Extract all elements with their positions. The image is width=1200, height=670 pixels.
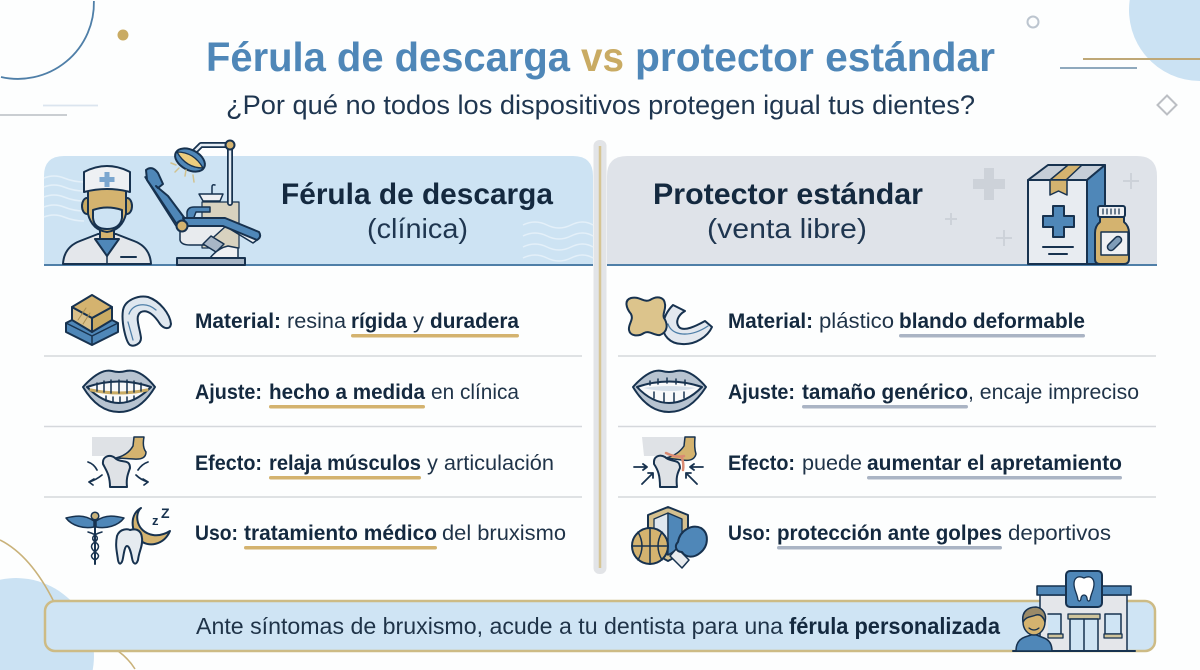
- row: protector efecto: [634, 437, 1122, 487]
- text: ajuste: [195, 381, 519, 408]
- text: efecto: Efecto:: [728, 452, 795, 475]
- text: material: blando deformable: [899, 310, 1085, 333]
- text: uso: Uso:: [195, 522, 238, 545]
- callout text: Ante síntomas de bruxismo, acude a tu dentista para una: [196, 613, 783, 639]
- text: material: plástico: [819, 310, 894, 333]
- icon: dental chair: [145, 140, 260, 265]
- text: ajuste: hecho a medida: [269, 381, 425, 404]
- callout: recommendation banner: [45, 571, 1155, 651]
- icon: fitted teeth: [83, 371, 155, 412]
- text: material: [195, 310, 519, 338]
- decoration: waves: [44, 176, 593, 261]
- title: vs: [581, 34, 624, 80]
- text: ajuste: en clínica: [431, 381, 519, 404]
- text: ajuste: [728, 381, 1139, 408]
- title: protector estándar: [635, 34, 995, 80]
- heading: férula: Férula de descarga: [281, 178, 553, 211]
- row: férula material: [66, 295, 519, 346]
- callout text: férula personalizada: [789, 613, 1000, 639]
- text: ajuste: tamaño genérico: [802, 381, 968, 404]
- text: material: Material:: [728, 310, 813, 333]
- text: efecto: puede: [802, 452, 862, 475]
- icon: relaxed joint: [88, 437, 148, 487]
- title: Férula de descarga: [206, 34, 571, 80]
- decoration: plus signs: [945, 168, 1139, 246]
- text: material: duradera: [430, 310, 519, 333]
- icon: dental clinic: [1013, 571, 1135, 651]
- row: protector uso: [632, 507, 1111, 568]
- subtitle: ¿Por qué no todos los dispositivos protegen igual tus dientes?: [226, 90, 975, 120]
- text: ajuste: Ajuste:: [195, 381, 262, 404]
- text: uso: [195, 522, 566, 550]
- subheading: clínica: (clínica): [367, 213, 468, 244]
- text: ajuste: , encaje impreciso: [968, 381, 1139, 404]
- text: material: y: [413, 310, 425, 333]
- icon: shield, ball and glove: [632, 507, 707, 568]
- icon: resin block and splint: [66, 295, 171, 346]
- text: uso: tratamiento médico: [244, 522, 437, 545]
- text: uso: Uso:: [728, 522, 771, 545]
- icon: generic fit teeth: [633, 371, 706, 412]
- row: protector material: [626, 297, 1085, 344]
- text: material: Material:: [195, 310, 281, 333]
- text: efecto: [195, 452, 554, 480]
- text: ajuste: Ajuste:: [728, 381, 795, 404]
- text: uso: [728, 522, 1111, 550]
- icon: dentist at door: [1016, 607, 1052, 651]
- decoration: top-left shapes: [0, 1, 128, 115]
- row: protector ajuste: [633, 371, 1139, 412]
- text: uso: del bruxismo: [442, 522, 566, 545]
- center divider: [594, 140, 606, 574]
- icon: clenching joint: [634, 437, 703, 487]
- row: férula uso: [66, 505, 566, 564]
- icon: soft plastic guard: [626, 297, 712, 344]
- text: uso: deportivos: [1008, 522, 1111, 545]
- row: férula ajuste: [83, 371, 519, 412]
- text: efecto: y articulación: [427, 452, 554, 475]
- icon: caduceus, tooth and moon: z: [152, 513, 159, 528]
- icon: box and bottle: [1028, 165, 1129, 264]
- text: efecto: [728, 452, 1122, 480]
- text: material: resina: [287, 310, 346, 333]
- text: material: rígida: [351, 310, 407, 333]
- panel: férula de descarga header: [44, 140, 593, 265]
- text: uso: protección ante golpes: [777, 522, 1002, 545]
- title: [206, 34, 995, 80]
- text: efecto: aumentar el apretamiento: [867, 452, 1122, 475]
- decoration: top-right shapes: [1028, 0, 1200, 114]
- text: material: [728, 310, 1085, 338]
- icon: dentist: [63, 166, 151, 264]
- icon: caduceus, tooth and moon: Z: [161, 505, 170, 521]
- panel: protector estándar header: [607, 156, 1157, 265]
- text: efecto: Efecto:: [195, 452, 262, 475]
- decoration: bottom-left shapes: [0, 540, 135, 670]
- subheading: venta libre: (venta libre): [707, 213, 867, 244]
- heading: protector: Protector estándar: [653, 178, 923, 211]
- text: efecto: relaja músculos: [269, 452, 421, 475]
- row: férula efecto: [88, 437, 554, 487]
- dividers: [44, 356, 1156, 497]
- icon: caduceus, tooth and moon: [66, 505, 170, 564]
